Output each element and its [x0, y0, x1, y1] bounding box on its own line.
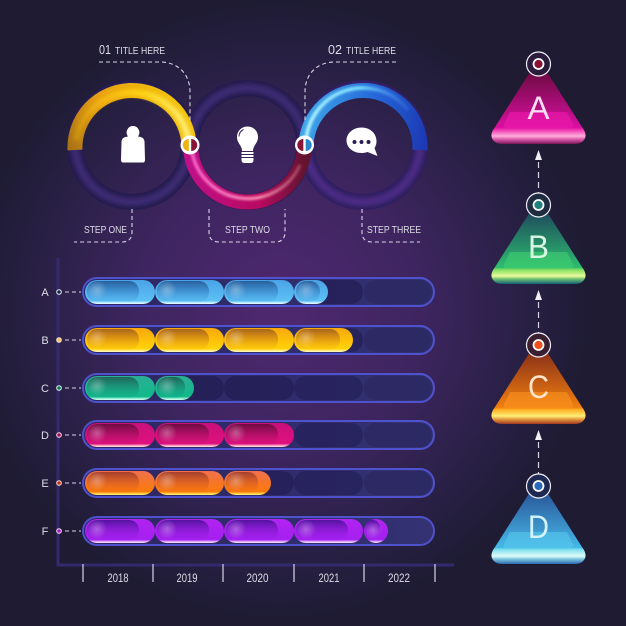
callout: step one: STEP ONE	[84, 224, 127, 236]
row F: F	[42, 526, 49, 538]
icon: person	[121, 126, 145, 162]
row D	[41, 421, 434, 449]
row E: E	[41, 478, 49, 490]
arrow: C to B	[535, 290, 542, 333]
triangle C	[491, 333, 586, 424]
panel: linked step rings	[74, 42, 421, 242]
triangle B: B	[528, 229, 549, 265]
panel: triangle flow	[491, 52, 586, 564]
row E	[41, 469, 434, 497]
triangle B	[491, 193, 586, 284]
callout: step two: STEP TWO	[225, 224, 270, 236]
magenta arc	[190, 145, 304, 202]
row C	[41, 374, 434, 402]
row A	[41, 278, 434, 306]
x axis ticks and years: 2019	[176, 573, 198, 585]
row A: A	[41, 287, 49, 299]
callout: step one	[74, 209, 132, 242]
callout: 02 title: TITLE HERE	[346, 45, 396, 57]
chart axes	[58, 258, 454, 565]
arrow: D to C	[535, 430, 542, 474]
junction node left	[180, 136, 200, 154]
triangle D: D	[528, 509, 549, 545]
junction node right	[295, 136, 314, 154]
x axis ticks and years: 2020	[246, 573, 268, 585]
row D: D	[41, 430, 49, 442]
base rings	[75, 88, 420, 202]
callout: 01 title: TITLE HERE	[115, 45, 165, 57]
callout: 02 title	[305, 42, 396, 122]
panel: bar chart	[41, 258, 454, 585]
row F	[42, 517, 434, 545]
row C: C	[41, 383, 49, 395]
triangle A	[491, 52, 586, 144]
gold arc	[75, 90, 189, 150]
x axis ticks and years: 2021	[318, 573, 340, 585]
triangle C: C	[528, 369, 549, 405]
callout: step two	[209, 209, 285, 242]
callout: 01 title: 01	[99, 42, 111, 57]
x axis ticks and years: 2018	[108, 573, 128, 585]
row B	[41, 326, 434, 354]
arrow: B to A	[535, 150, 542, 193]
callout: step three	[362, 209, 421, 242]
triangle A: A	[528, 90, 550, 126]
row B: B	[41, 335, 49, 347]
x axis ticks and years: 2022	[388, 573, 410, 585]
x axis ticks and years	[83, 564, 435, 585]
callout: 02 title: 02	[328, 42, 342, 57]
blue arc	[306, 88, 420, 150]
callout: step three: STEP THREE	[367, 224, 421, 236]
triangle D	[491, 474, 586, 564]
icon: light bulb	[237, 126, 258, 163]
callout: 01 title	[99, 42, 190, 122]
icon: speech bubble	[346, 128, 378, 156]
